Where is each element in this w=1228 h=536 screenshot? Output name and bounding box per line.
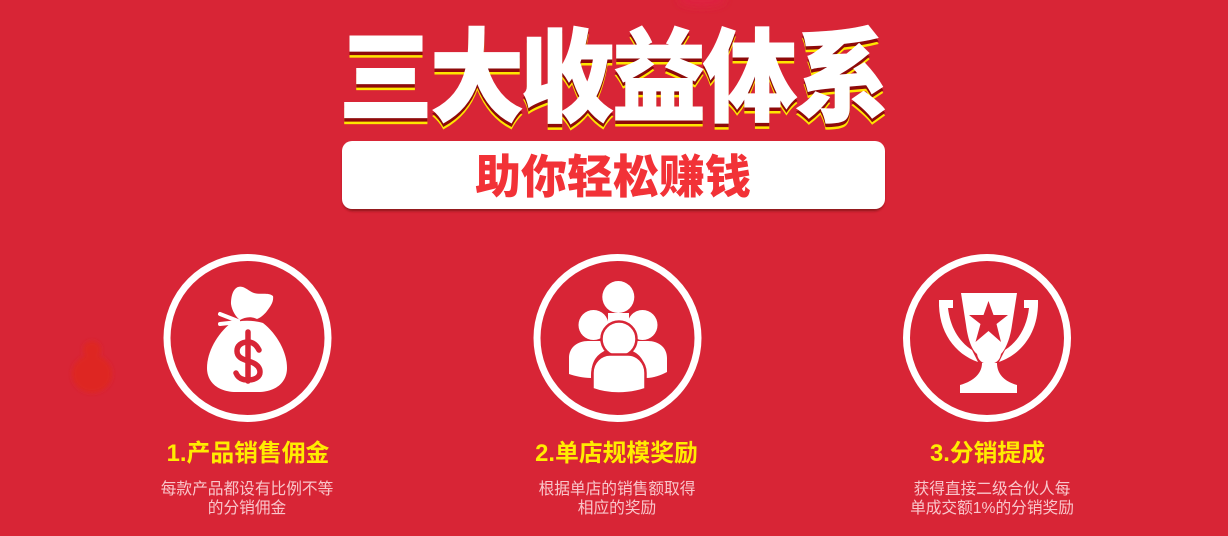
icon: trophy in circle bbox=[906, 258, 1068, 418]
title dark red layer: 益 bbox=[612, 1, 706, 147]
icon: group of people in circle bbox=[537, 258, 698, 418]
title dark red layer: 体 bbox=[703, 1, 797, 147]
description 2 bbox=[539, 480, 695, 517]
title white layer: 收 bbox=[520, 0, 614, 143]
title dark red layer bbox=[339, 1, 889, 147]
title white layer: 系 bbox=[795, 0, 889, 143]
description 1: 每款产品都设有比例不等 bbox=[161, 480, 333, 498]
description 2: 根据单店的销售额取得 bbox=[539, 480, 695, 498]
title dark red layer: 收 bbox=[520, 1, 614, 147]
column 3: distribution commission bbox=[906, 258, 1074, 517]
title dark red layer: 大 bbox=[430, 1, 524, 147]
title yellow layer bbox=[339, 3, 889, 149]
description 2: 相应的奖励 bbox=[578, 498, 656, 517]
subtitle banner bbox=[342, 141, 885, 211]
title yellow layer: 三 bbox=[339, 3, 433, 149]
faint decorative blob bbox=[72, 341, 112, 393]
description 3: 单成交额1%的分销奖励 bbox=[910, 499, 1074, 517]
description 3: 获得直接二级合伙人每 bbox=[914, 480, 1071, 498]
title yellow layer: 系 bbox=[795, 3, 889, 149]
title dark red layer: 系 bbox=[795, 1, 889, 147]
dollar sign bbox=[236, 332, 260, 381]
title yellow layer: 收 bbox=[520, 3, 614, 149]
description 1 bbox=[161, 480, 333, 517]
subtitle text: 助你轻松赚钱 bbox=[475, 141, 751, 207]
heading 3: 3.分销提成 bbox=[930, 440, 1045, 467]
icon: money bag in circle bbox=[167, 258, 328, 418]
description 1: 的分销佣金 bbox=[208, 499, 287, 517]
title white layer: 大 bbox=[430, 0, 524, 143]
title white layer: 体 bbox=[703, 0, 797, 143]
heading 2: 2.单店规模奖励 bbox=[535, 440, 698, 467]
title yellow layer: 益 bbox=[612, 3, 706, 149]
title yellow layer: 体 bbox=[703, 3, 797, 149]
title bbox=[339, 0, 889, 149]
title white layer: 三 bbox=[339, 0, 433, 143]
title yellow layer: 大 bbox=[430, 3, 524, 149]
star bbox=[969, 301, 1008, 342]
description 3 bbox=[910, 480, 1074, 517]
column 2: store scale award bbox=[535, 258, 698, 517]
heading 1: 1.产品销售佣金 bbox=[167, 439, 330, 467]
faint top glow bbox=[678, 0, 726, 7]
column 1: product sales commission bbox=[161, 258, 333, 517]
title white layer bbox=[339, 0, 889, 143]
title white layer: 益 bbox=[612, 0, 706, 143]
title dark red layer: 三 bbox=[339, 1, 433, 147]
